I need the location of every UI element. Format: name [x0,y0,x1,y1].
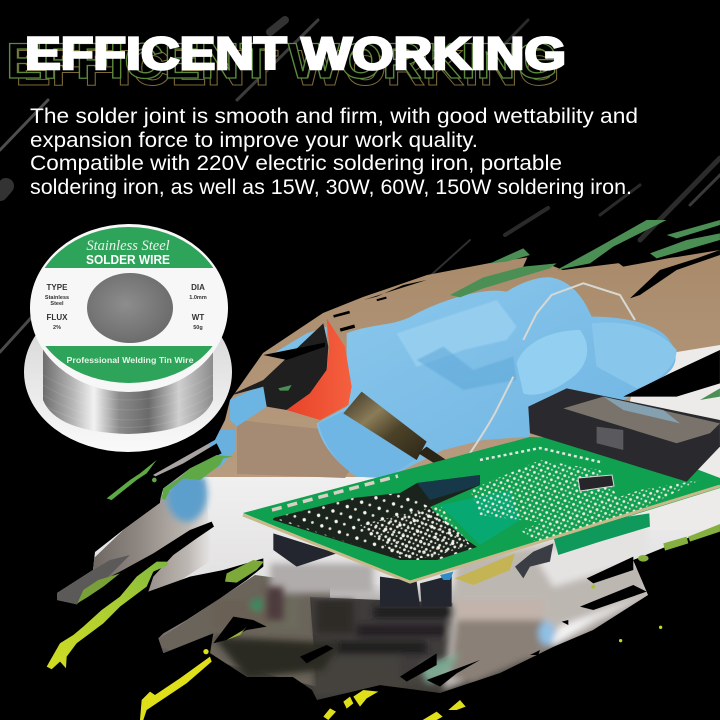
upper sliver by spool [153,440,215,485]
right green stroke b [688,524,720,542]
brown backdrop [150,240,720,480]
background diagonal streaks [0,20,720,352]
spec labels right: WT [192,313,204,322]
blurred lower photo background [260,523,647,697]
right green stroke a [663,537,688,551]
board tan edge [243,486,720,582]
top green band [32,227,226,389]
small blue part [440,572,453,580]
spec labels right: DIA [191,283,205,292]
right table [630,345,720,477]
handle slash [263,343,325,360]
left finger [230,383,267,427]
blue patch [417,475,480,500]
solder wire [460,283,635,468]
black brush cuts [77,220,720,687]
white table surface [40,477,720,707]
right black slash over hand [623,350,720,397]
green stroke under spool [107,460,157,500]
glove highlight [397,300,517,367]
yellow blob a [353,690,378,707]
stroke c [650,233,720,258]
title: EFFICENT WORKING [25,28,566,79]
stroke f [700,388,720,400]
spec labels left: Steel [50,301,64,307]
brand text script: Stainless Steel [86,238,170,254]
upper green strokes [278,220,720,400]
speck 2 [333,311,350,318]
stroke d [667,220,720,238]
capacitor legs right [420,575,452,607]
right notch upper [587,557,633,583]
lower flange [24,292,232,452]
lime speck [659,626,662,629]
small olive in floor [227,627,247,640]
left black block [273,533,337,567]
top disc [30,224,228,392]
top right cut [617,220,720,267]
iron shaft [343,392,427,460]
main black slash [77,522,263,663]
dim floor [213,637,340,678]
floor edge [163,633,213,653]
black connector on board [528,388,720,482]
far right solder rows [520,480,700,545]
green speck b [591,585,595,589]
blurred left photo parts [166,465,340,678]
blue finger by spool [205,430,236,472]
left grey sliver [57,555,130,605]
spec labels right: 50g [193,325,203,331]
tagline: Professional Welding Tin Wire [66,355,194,365]
yellow stroke [140,657,212,720]
body text: The solder joint is smooth and firm, with good wettability and [30,105,638,128]
green bottom corner [420,653,460,683]
gloved hand [230,277,677,478]
bottom cut [400,653,437,682]
upper finger [273,327,327,360]
green stroke by blue finger [162,455,233,500]
spec labels left: 2% [53,325,61,331]
yellow blob e [423,712,443,720]
body text: expansion force to improve your work quality. [30,129,478,152]
thumb finger [517,330,587,395]
yellow transformer [455,553,515,585]
green speck [152,478,157,482]
white highlight [549,598,638,648]
stroke e [450,263,557,297]
connector blue haze [603,397,680,423]
yellow speck [203,649,209,654]
spec labels right: 1.0mm [189,295,207,301]
top right pins row [480,448,600,462]
spec labels left: FLUX [47,313,68,322]
bottom cut 3 [300,645,333,663]
rib gaps floor [313,657,400,697]
body text [30,105,638,199]
dark copper patch [273,475,480,560]
parts under the board [273,513,650,607]
upper scene cuts [263,220,720,397]
olive stroke [77,573,120,603]
iron tip [418,447,460,476]
title outline shadow green: EFFICENT WORKING [6,33,558,89]
spec labels left: Stainless [45,295,69,301]
green and lime brush strokes [47,220,720,720]
speck 1 [340,325,355,332]
edge fleck [530,650,540,655]
dark rib 1 [373,607,453,618]
green speck a [638,555,649,562]
microchip [578,475,614,491]
dark capacitor [317,600,353,633]
iron black handle [227,323,328,410]
circuit board [240,430,720,590]
yellow blob b [343,697,353,709]
brand text bold: SOLDER WIRE [86,253,170,267]
left dim parts [213,600,270,627]
upper edge parts row [272,476,398,510]
dense solder cluster [360,505,470,558]
yellow blob c [323,708,336,720]
right notch lower [580,585,647,610]
green dim spot [251,599,263,611]
connector slot [597,427,623,450]
dark rib 2 [357,625,447,636]
skin tone wrist area [237,420,350,478]
handle speck [278,385,292,391]
warm block [457,600,543,620]
spec labels right [189,283,207,331]
right solder cluster [470,460,620,525]
floor tangle [213,617,267,643]
dark capacitors [515,543,553,578]
teal patch [440,490,520,545]
lime speck 2 [619,639,622,642]
top edge streak [363,280,427,300]
left lower strokes [47,455,264,720]
bottom green band [32,233,226,383]
board base [240,430,720,590]
bottom cut 2 [427,660,480,687]
green connector [553,513,650,555]
right finger shadow [592,323,677,388]
lower left floor base [150,575,330,690]
blue blurred finger [166,465,207,522]
soldering iron [227,318,460,476]
center hole [87,273,173,343]
wire coil [43,340,213,434]
speck 3 [377,297,387,301]
right lower cuts [300,557,647,687]
mid green stroke [225,560,264,583]
stroke b [490,248,530,263]
left grey hand base [58,480,208,604]
big lime stroke [47,562,168,669]
photo: hands soldering a circuit board [40,240,720,707]
black top streak [522,252,560,272]
right table mid grey [443,527,647,690]
blurred blue [539,621,555,645]
solder wire spool [24,224,232,452]
glove fold shadow [417,347,517,390]
stroke a [557,220,667,270]
edge fleck 2 [562,620,568,625]
left lower cuts [77,443,267,663]
connector body [528,388,720,482]
dark rib 3 [337,642,427,653]
spec labels left [45,283,69,331]
coil lines [43,375,213,428]
yellow blob d [448,700,466,710]
body text: soldering iron, as well as 15W, 30W, 60W, 150W soldering iron. [30,176,632,199]
warm floor [450,620,553,683]
right fringe [630,250,720,298]
glove body [317,277,676,478]
left green components [260,597,300,630]
light band [533,523,647,587]
slash under spool [155,443,222,500]
left blurred grey [270,563,373,593]
connector top glass [563,397,720,443]
dark ribs base [310,597,457,693]
spec labels left: TYPE [47,283,68,292]
iron red collar [287,318,352,420]
right lower strokes [323,524,720,720]
red dim cap [267,587,283,620]
lower sleeve [318,407,417,478]
title outline shadow tan: EFFICENT WORKING [15,40,560,96]
body text: Compatible with 220V electric soldering iron, portable [30,152,562,175]
capacitor legs left [380,577,420,607]
solder dots on dark patch [273,493,477,560]
